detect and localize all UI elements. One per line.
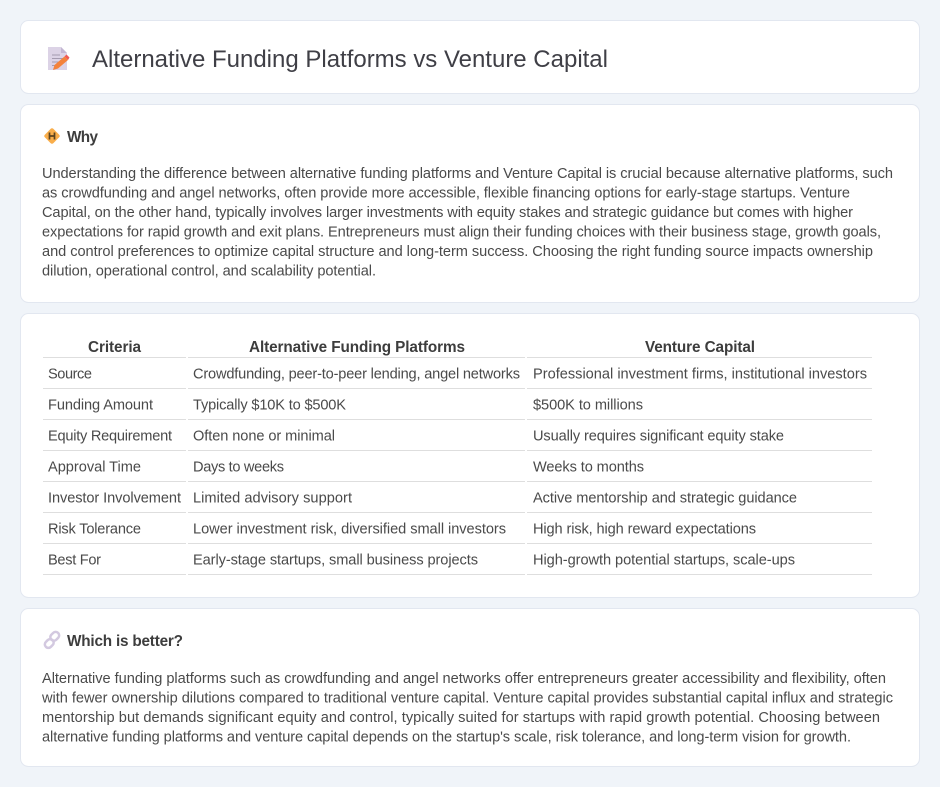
table header: Venture Capital [645,339,755,356]
panel: title [20,20,920,94]
panel: which is better [20,608,920,766]
text block: why: Understanding the difference between alternative funding platforms and Venture Capital is crucial because alternative platforms, such [42,166,893,182]
text block: why: expectations for rapid growth and exit plans. Entrepreneurs must align their funding choices with their business stage, growth goals, [42,224,881,240]
row: equity requirement: Often none or minimal [193,428,335,444]
row: best for: Early-stage startups, small business projects [193,552,478,568]
row: equity requirement: Equity Requirement [48,428,172,444]
row: risk tolerance: Risk Tolerance [48,522,141,538]
text block: which is better: Alternative funding platforms such as crowdfunding and angel networks offer entrepreneurs greater accessibility and flexibility, often [42,671,886,687]
row: source: Professional investment firms, institutional investors [533,366,867,382]
row: risk tolerance [48,522,756,538]
panel: why [20,104,920,302]
row: approval time: Approval Time [48,460,141,476]
row: investor involvement: Investor Involvement [48,490,181,506]
text block: why: and control preferences to optimize capital structure and long-term success. Choosing the right funding source impacts ownership [42,244,873,260]
text block: which is better: alternative funding platforms and venture capital depends on the startup's scale, risk tolerance, and long-term vision for growth. [42,730,851,746]
row: source [48,366,867,382]
row: investor involvement: Active mentorship and strategic guidance [533,490,797,506]
row: funding amount [48,398,643,414]
text block: which is better: with fewer ownership dilutions compared to traditional venture capital. Venture capital provides substantial capital influx and strategic [41,690,893,706]
table header: Criteria [88,339,141,356]
row: investor involvement [48,490,797,506]
row: best for [48,552,795,568]
row: funding amount: $500K to millions [533,398,643,414]
row: source: Source [48,366,92,382]
row: funding amount: Typically $10K to $500K [193,398,346,414]
row: risk tolerance: High risk, high reward expectations [533,522,756,538]
icon: road sign diamond [44,128,60,144]
row: equity requirement [48,428,784,444]
row: best for: High-growth potential startups, scale-ups [533,552,795,568]
text block: which is better [41,671,893,746]
table header [88,339,755,356]
text block: why: dilution, operational control, and scalability potential. [42,264,376,280]
row: risk tolerance: Lower investment risk, diversified small investors [193,522,506,538]
table header: Alternative Funding Platforms [249,339,465,356]
row: equity requirement: Usually requires significant equity stake [533,428,784,444]
row: approval time: Days to weeks [193,460,284,476]
heading: why: Why [67,129,98,146]
row: funding amount: Funding Amount [48,398,153,414]
row: source: Crowdfunding, peer-to-peer lending, angel networks [193,366,520,382]
icon: chain link [43,630,61,649]
row: approval time [48,460,644,476]
row: investor involvement: Limited advisory support [193,490,352,506]
panel: comparison table [20,314,920,598]
heading: which is better: Which is better? [67,633,183,650]
text block: why [42,166,893,280]
text block: why: Capital, on the other hand, typically involves larger investments with equity stakes and strategic guidance but comes with higher [42,205,853,221]
title: Alternative Funding Platforms vs Venture Capital [92,46,608,73]
row: approval time: Weeks to months [533,460,644,476]
text block: why: as crowdfunding and angel networks, often provide more accessible, flexible financing options for early-stage startups. Venture [42,186,850,202]
row: best for: Best For [48,552,101,568]
icon: document with pencil [48,47,70,70]
text block: which is better: mentorship but demands significant equity and control, typically suited for startups with rapid growth potential. Choosing between [42,710,880,726]
